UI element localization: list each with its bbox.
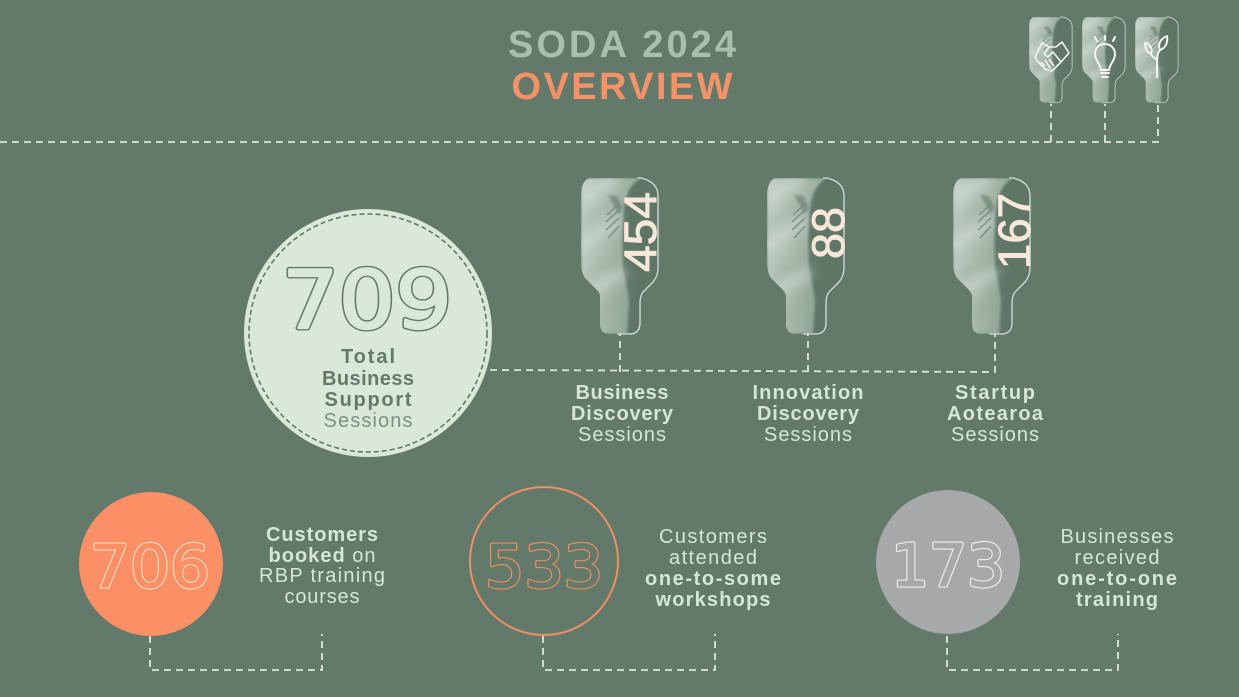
total number: 709 xyxy=(282,254,452,347)
text: businesses received: received xyxy=(1074,547,1160,569)
text: customers attended: one-to-some xyxy=(645,568,781,590)
text: businesses received: training xyxy=(1076,589,1158,611)
label: startup aotearoa sessions: Sessions xyxy=(951,424,1039,446)
bottle: innovation discovery 88: 88 xyxy=(803,207,854,259)
icon: light bulb bottle xyxy=(1080,17,1125,103)
label: startup aotearoa sessions: Aotearoa xyxy=(947,403,1044,425)
label: innovation discovery sessions: Discovery xyxy=(757,403,860,425)
title xyxy=(508,24,736,108)
bottle: business discovery 454: 454 xyxy=(615,192,666,272)
connector: 173 xyxy=(947,634,1118,670)
total label: Business xyxy=(322,368,414,390)
bottle: startup aotearoa 167 xyxy=(949,178,1040,334)
text: customers booked: courses xyxy=(284,586,360,608)
stat: 706 orange circle xyxy=(79,492,223,636)
label: business discovery sessions xyxy=(571,382,674,446)
text: customers booked xyxy=(259,524,385,608)
total label xyxy=(322,346,414,432)
connector: 706 xyxy=(150,634,322,670)
total label: Total xyxy=(341,346,395,368)
bottle: startup aotearoa 167: 167 xyxy=(989,193,1040,269)
bottle: innovation discovery 88 xyxy=(763,178,854,334)
stat: 533 outlined circle: 533 xyxy=(485,532,603,601)
panel: total sessions circle xyxy=(244,209,492,457)
text: customers booked: RBP training xyxy=(259,565,385,587)
title: SODA 2024 xyxy=(508,24,736,66)
text: customers attended xyxy=(645,526,781,611)
stat: 533 outlined circle: 533 xyxy=(485,532,603,601)
stat: 706 orange circle: 706 xyxy=(90,532,210,601)
label: business discovery sessions: Discovery xyxy=(571,403,674,425)
text: customers attended: attended xyxy=(669,547,757,569)
text: customers attended: Customers xyxy=(659,526,767,548)
label: innovation discovery sessions xyxy=(752,382,864,446)
label: startup aotearoa sessions: Startup xyxy=(955,382,1035,404)
connector: 533 xyxy=(543,634,715,670)
icon: handshake bottle xyxy=(1027,17,1072,103)
text: businesses received xyxy=(1057,526,1177,611)
connector: total to session bottles xyxy=(490,305,995,372)
label: business discovery sessions: Business xyxy=(576,382,668,404)
label: innovation discovery sessions: Innovation xyxy=(752,382,864,404)
stat: 706 orange circle: 706 xyxy=(90,532,210,601)
total label: Sessions xyxy=(324,410,412,432)
text: businesses received: Businesses xyxy=(1060,526,1174,548)
total label: Support xyxy=(324,389,412,411)
total number: 709 xyxy=(282,254,452,347)
text: customers booked: Customers xyxy=(266,524,378,546)
label: startup aotearoa sessions xyxy=(947,382,1044,446)
text: customers booked: booked on xyxy=(268,545,376,567)
text: customers attended: workshops xyxy=(654,589,770,611)
label: innovation discovery sessions: Sessions xyxy=(764,424,852,446)
stat: 173 grey circle: 173 xyxy=(891,531,1005,600)
title: OVERVIEW xyxy=(512,66,733,108)
top dashed connector xyxy=(0,104,1158,142)
icon: plant bottle xyxy=(1133,17,1178,103)
label: business discovery sessions: Sessions xyxy=(578,424,666,446)
text: businesses received: one-to-one xyxy=(1057,568,1177,590)
stat: 173 grey circle: 173 xyxy=(891,531,1005,600)
bottle: business discovery 454 xyxy=(577,178,666,334)
stat: 173 grey circle xyxy=(876,490,1020,634)
stat: 533 outlined circle xyxy=(470,487,618,635)
